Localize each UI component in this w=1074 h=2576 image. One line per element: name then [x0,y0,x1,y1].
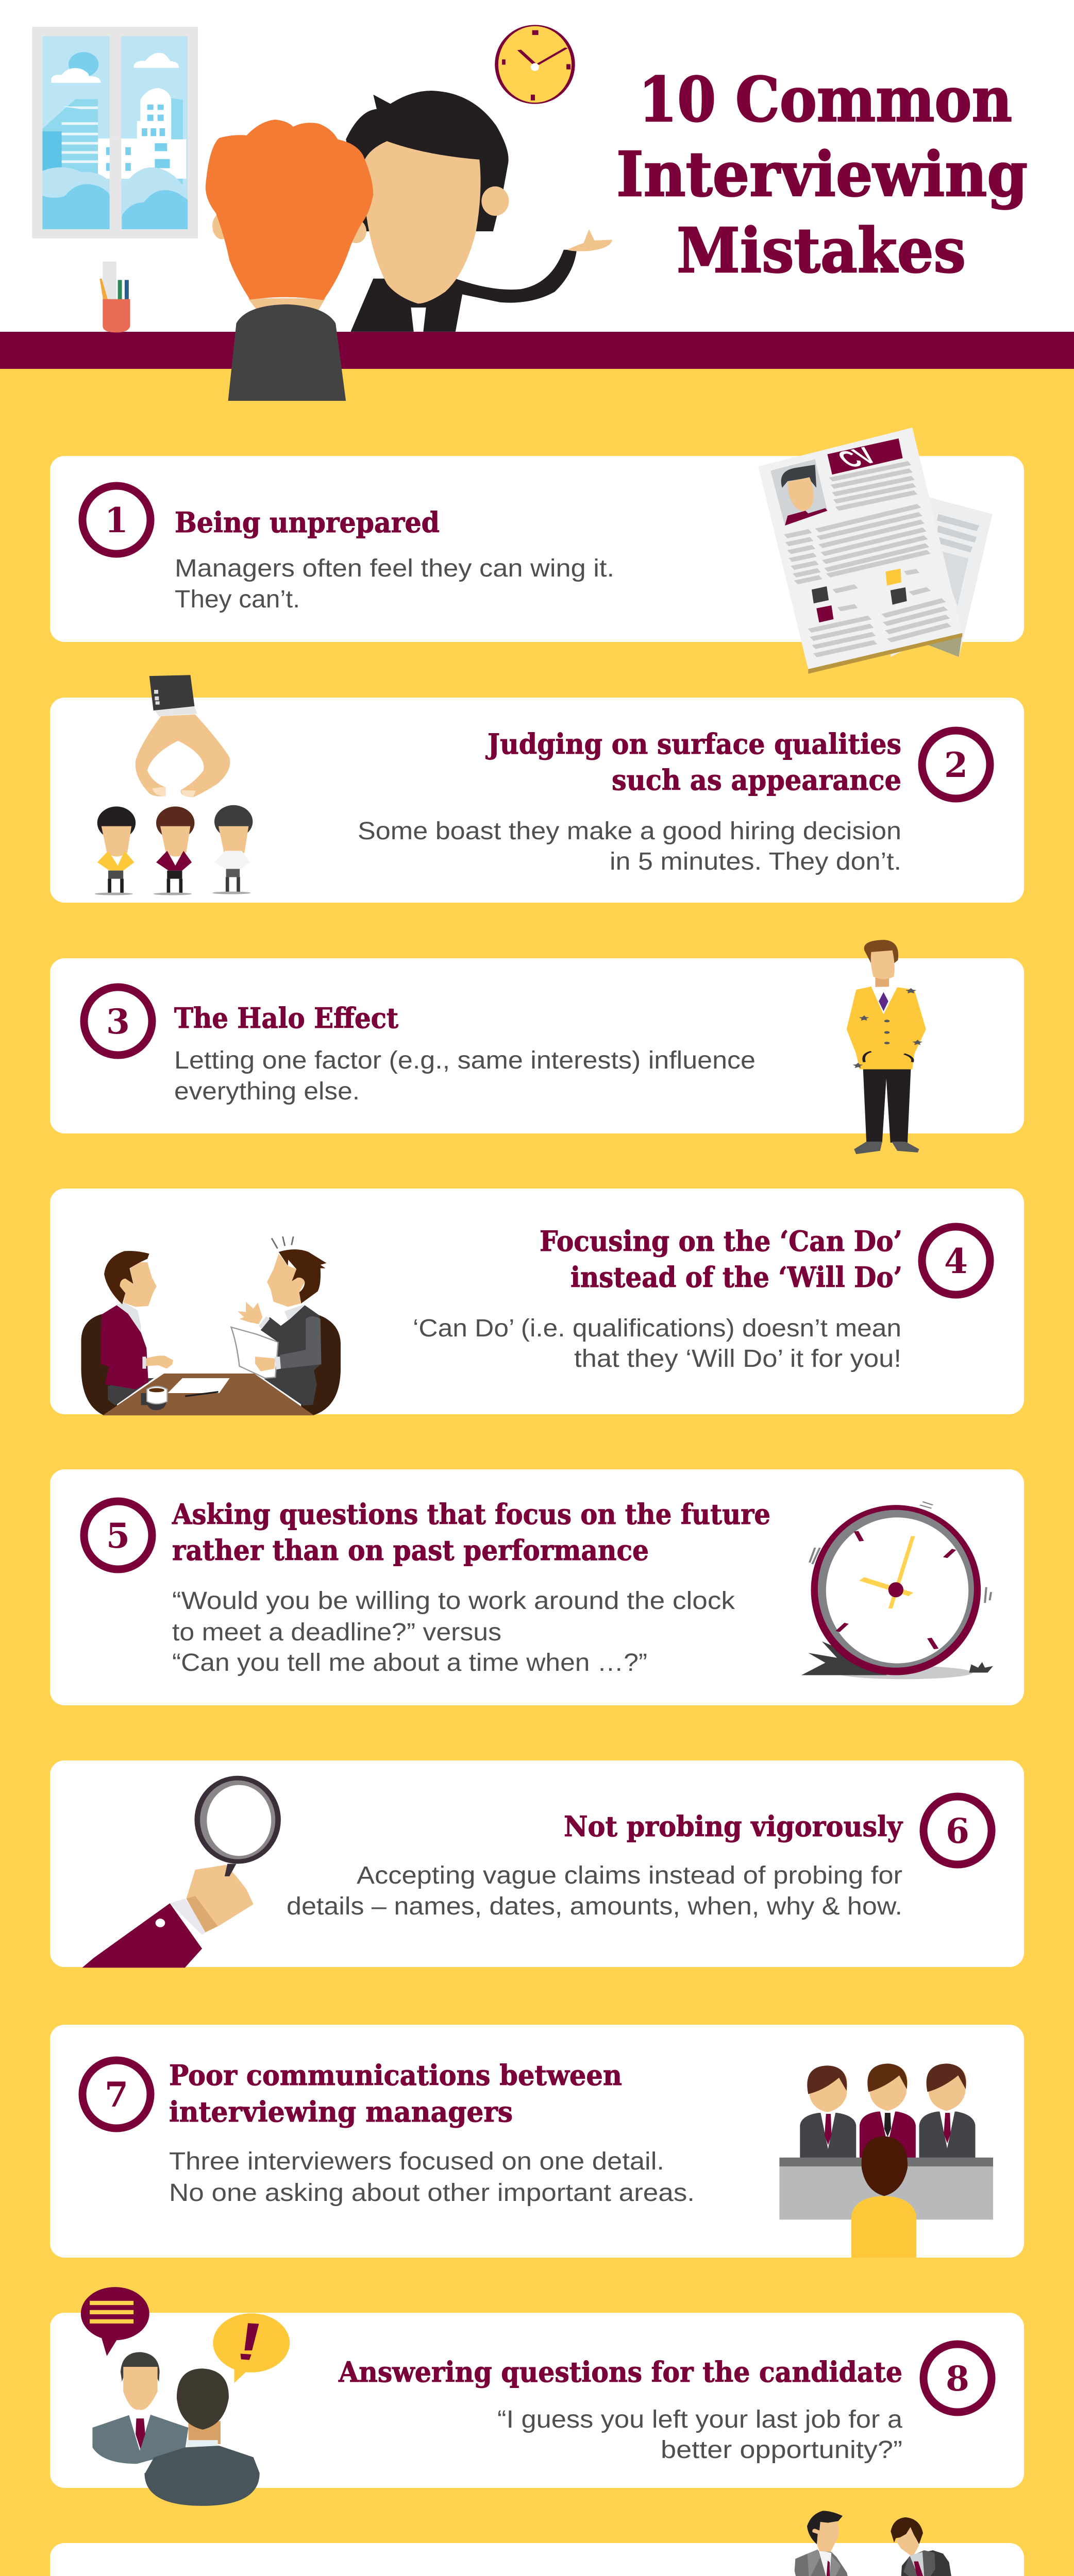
heading 2: such as appearance [612,764,901,796]
figure: interview at a table [81,1236,341,1415]
heading 4: instead of the ‘Will Do’ [570,1261,902,1294]
body 7 [169,2148,695,2207]
panel: mistake 4 [50,1189,1024,1415]
body 2: Some boast they make a good hiring decision [358,818,901,845]
figure: two men at a table [795,2511,992,2576]
title: 10 Common [639,64,1012,136]
card 2 [50,698,1024,903]
figure: candidate [206,120,373,401]
number 1 [82,486,150,554]
icon: falling clock [801,1502,993,1679]
number 1: 1 [105,500,128,540]
body 6: Accepting vague claims instead of probing for [357,1862,902,1889]
heading 1: Being unprepared [175,506,440,539]
number 8 [924,2344,992,2412]
card 6 [50,1760,1024,1967]
heading 5: rather than on past performance [172,1534,649,1567]
number 4 [922,1227,990,1295]
number 5: 5 [106,1516,130,1556]
header band [0,332,1074,369]
number 6: 6 [946,1811,969,1851]
icon: CV documents: CV [830,442,883,472]
body 1: They can’t. [175,586,300,613]
icon: hand picking candidates [94,675,253,895]
body 6: details – names, dates, amounts, when, why & how. [287,1893,902,1920]
number 7: 7 [105,2075,128,2115]
heading 7: Poor communications between [169,2059,622,2092]
number 3 [84,987,152,1055]
heading 5 [172,1498,770,1567]
figure: man in yellow jacket [847,940,926,1154]
card 4 [50,1189,1024,1414]
card 5 [50,1469,1024,1705]
body 8: better opportunity?” [661,2436,902,2464]
body 5: “Can you tell me about a time when …?” [172,1649,647,1676]
heading 7 [169,2059,622,2128]
card 3 [50,958,1024,1133]
panel: mistake 5 [50,1469,1024,1705]
body 1: Managers often feel they can wing it. [175,555,614,582]
number 7 [82,2060,150,2128]
number 6 [924,1797,992,1865]
card 1 [50,456,1024,642]
figure: interview panel [779,2063,993,2258]
number 2 [922,731,990,799]
number 4: 4 [944,1241,968,1281]
heading 7: interviewing managers [169,2095,513,2128]
body 4: that they ‘Will Do’ it for you! [574,1345,901,1372]
card 7 [50,2025,1024,2258]
panel: mistake 6 [50,1760,1024,1968]
heading 8: Answering questions for the candidate [338,2355,902,2388]
icon: magnifying glass in hand [82,1776,281,1968]
heading 6: Not probing vigorously [564,1810,903,1843]
body 7: Three interviewers focused on one detail. [169,2148,664,2175]
icon: pencil cup [100,262,130,332]
header illustration [32,25,612,401]
heading 2: Judging on surface qualities [485,727,901,760]
panel: mistake 9 [50,2511,1024,2576]
body 5 [172,1587,735,1676]
number 2: 2 [944,745,968,785]
figure: interviewer [346,91,612,332]
number 8: 8 [946,2359,969,2399]
number 3: 3 [106,1002,130,1042]
panel: mistake 1 [50,428,1024,674]
icon: CV documents [758,428,993,674]
body 4: ‘Can Do’ (i.e. qualifications) doesn’t mean [413,1315,901,1342]
number 5 [84,1501,152,1569]
icon: clock [497,25,573,104]
body 8: “I guess you left your last job for a [497,2406,902,2433]
panel: mistake 2 [50,675,1024,903]
body 3: everything else. [174,1078,360,1105]
title: Mistakes [677,215,966,287]
heading 2 [485,727,901,796]
body 4 [413,1315,901,1372]
figure: two men talking with speech bubbles [81,2287,290,2506]
heading 4: Focusing on the ‘Can Do’ [540,1225,902,1258]
panel: mistake 7 [50,2025,1024,2258]
body 7: No one asking about other important areas. [169,2179,695,2207]
body 3 [174,1047,756,1105]
body 6 [287,1862,902,1920]
heading 5: Asking questions that focus on the future [172,1498,770,1531]
body 3: Letting one factor (e.g., same interests) influence [174,1047,756,1074]
heading 3: The Halo Effect [174,1002,398,1035]
panel: mistake 3 [50,940,1024,1154]
heading 4 [540,1225,902,1294]
body 1 [175,555,614,613]
body 2 [358,818,901,875]
body 2: in 5 minutes. They don’t. [610,848,901,875]
body 8 [497,2406,902,2464]
card 9 [50,2543,1024,2576]
body 5: to meet a deadline?” versus [172,1619,501,1646]
icon: window [32,27,198,239]
title [616,64,1028,287]
title: Interviewing [616,139,1028,211]
body 5: “Would you be willing to work around the clock [172,1587,735,1615]
card 8 [50,2313,1024,2488]
panel: mistake 8 [50,2287,1024,2506]
